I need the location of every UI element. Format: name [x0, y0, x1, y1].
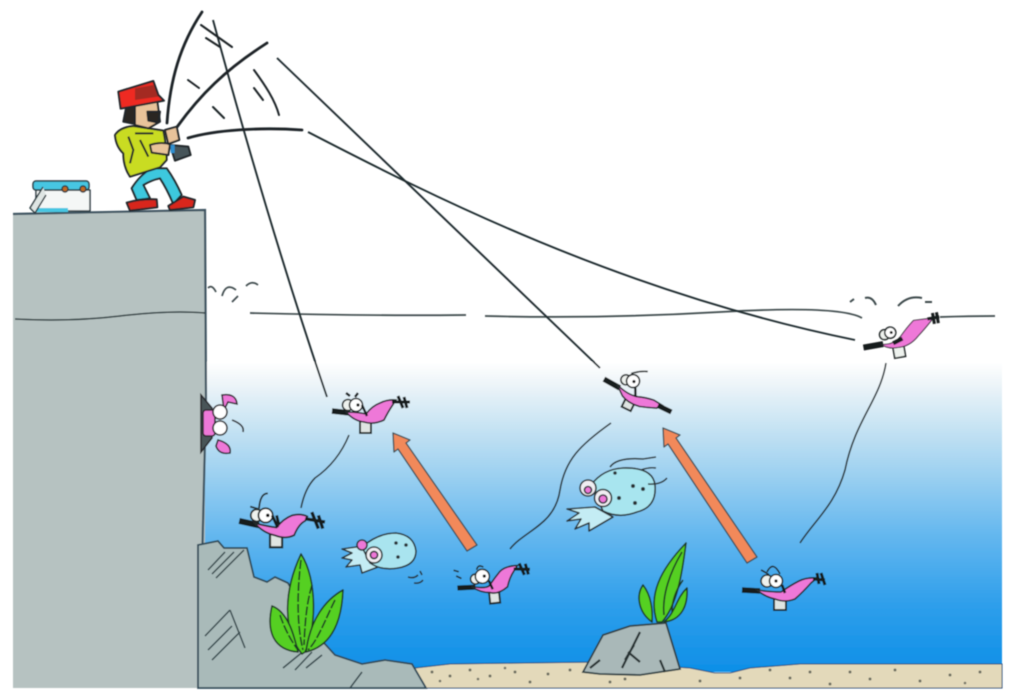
seabed: [415, 662, 1002, 688]
squid 2: [567, 457, 667, 531]
hat: [118, 81, 164, 109]
shrimp lure 4: [597, 356, 683, 427]
orange arrow 1: [393, 433, 477, 551]
cliff: [13, 210, 206, 688]
squid 1: [342, 533, 423, 583]
orange arrow 2: [663, 428, 757, 563]
reel: [170, 145, 191, 161]
legs: [132, 168, 182, 204]
shrimp lure 5: [742, 566, 825, 610]
fishing rods: [167, 12, 302, 138]
arm and hands: [150, 143, 170, 155]
fishing lines: [213, 20, 855, 397]
shrimp lure 1: [332, 393, 410, 433]
angler: [115, 81, 195, 211]
shoes: [127, 199, 157, 211]
cliff waterline: [15, 312, 205, 320]
center rock: [583, 623, 680, 675]
seaweed center: [639, 543, 687, 622]
jacket: [115, 126, 167, 177]
seabed gravel specks: [430, 667, 982, 686]
shrimp lure 2: [239, 493, 325, 547]
left underwater rock: [198, 541, 426, 688]
seaweed left: [270, 554, 343, 654]
water body: [200, 362, 1002, 672]
shrimp lure 6 at surface: [860, 312, 945, 363]
hiding shrimp on cliff: [201, 395, 243, 453]
splash marks at cliff: [208, 283, 258, 302]
shrimp lure 3: [453, 561, 533, 607]
tackle box: [30, 181, 90, 213]
surface line: [208, 283, 995, 318]
shrimp jump trajectories: [301, 363, 886, 549]
neck and face: [132, 102, 160, 128]
